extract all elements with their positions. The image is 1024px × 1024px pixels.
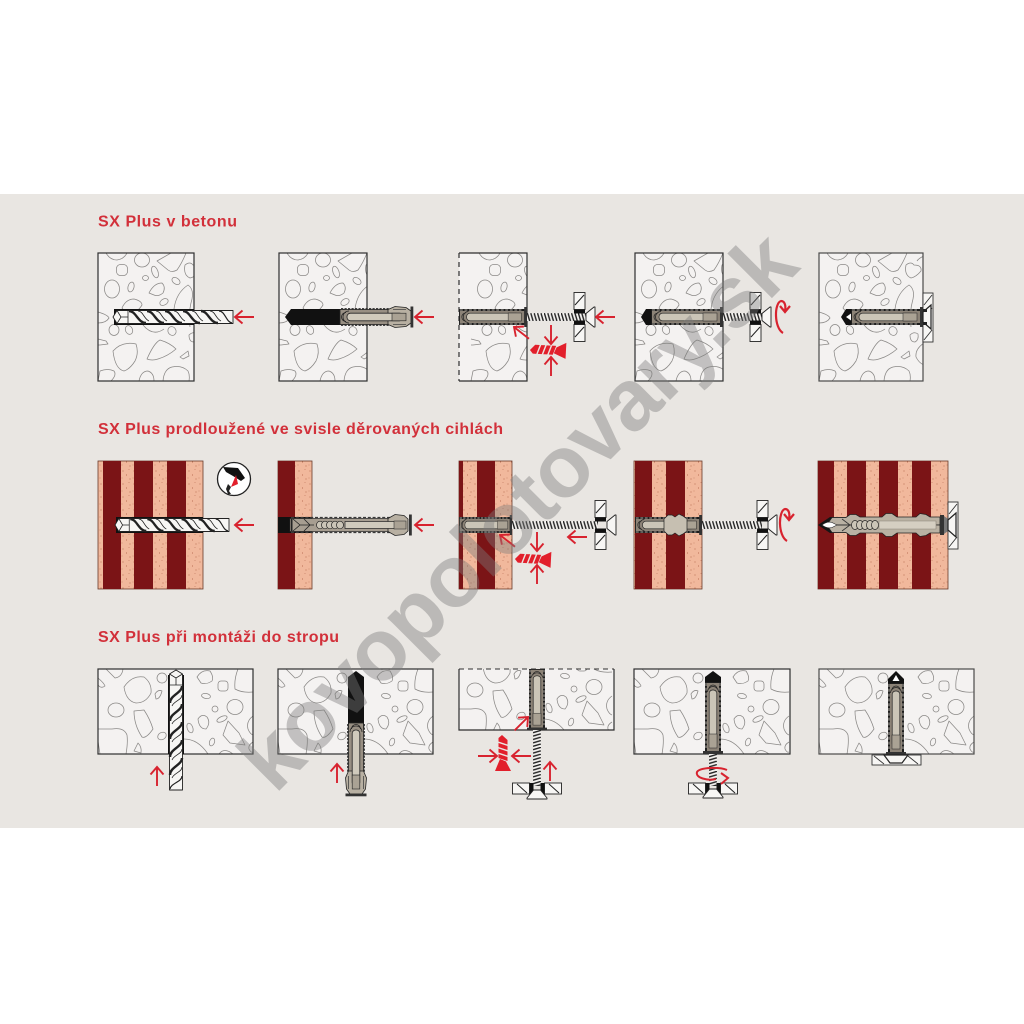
step 3: inserting screw through plate	[459, 461, 616, 589]
step row: ceiling	[98, 649, 974, 799]
step 1: drilling in brick	[98, 461, 254, 589]
step row: concrete	[98, 253, 933, 381]
step 2: inserting anchor upward	[278, 669, 433, 796]
step 2: inserting long anchor	[278, 461, 434, 589]
step 5: finished fixing	[819, 253, 933, 381]
step 1: drilling in concrete	[98, 253, 254, 381]
step 5: finished ceiling fixing	[819, 669, 974, 765]
watermark: kovopolotovary.sk	[220, 213, 816, 808]
heading: prodlouzene: SX Plus prodloužené ve svisle děrovaných cihlách	[98, 421, 503, 438]
step 5: finished fixing with expanded anchor	[818, 461, 958, 589]
icon: hammer drill prohibited mode	[218, 462, 250, 496]
step 3: inserting screw through plate	[459, 253, 615, 381]
step 4: tightening screw	[635, 253, 790, 381]
heading: SX Plus v betonu: SX Plus v betonu	[98, 214, 237, 230]
step row: perforated bricks	[98, 461, 958, 589]
heading: pri montazi do stropu: SX Plus při montáži do stropu	[98, 629, 339, 646]
step 2: inserting anchor	[279, 253, 434, 381]
step 4: tightening screw	[634, 461, 794, 589]
step 3: inserting screw with plate	[457, 649, 614, 799]
background band	[0, 194, 1024, 828]
step 1: drilling upward	[98, 669, 253, 790]
step 4: tightening screw	[634, 669, 790, 798]
